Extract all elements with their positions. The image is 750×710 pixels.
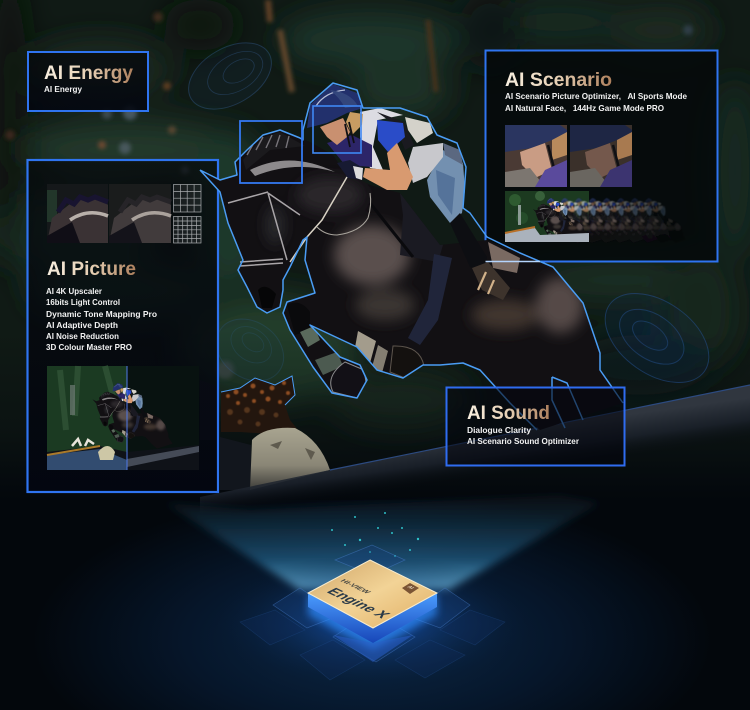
- feature list: AI Picture: Dynamic Tone Mapping Pro: [46, 309, 157, 319]
- chip badge: AI: [402, 583, 419, 594]
- thumbnail: face before: [505, 125, 567, 187]
- heading: AI Picture: AI Picture: [47, 259, 136, 280]
- feature list: AI Sound: Dialogue Clarity: [467, 425, 531, 435]
- feature list: AI Scenario: AI Natural Face, 144Hz Game Mode PRO: [505, 103, 664, 113]
- thumbnail: face after: [570, 125, 632, 187]
- icon: coarse pixel grid: [174, 184, 201, 212]
- comparison thumbnail: colour master: [47, 366, 199, 470]
- thumbnail: mane before: [47, 184, 108, 243]
- panel: AI Energy: [28, 52, 148, 111]
- chip badge: AI: AI: [405, 585, 416, 590]
- light beam from the chip: [165, 495, 600, 590]
- feature list: AI Sound: AI Scenario Sound Optimizer: [467, 436, 580, 446]
- thumbnail: mane after: [109, 184, 171, 243]
- panel: AI Picture: [28, 160, 218, 492]
- panel: AI Scenario: [486, 50, 718, 262]
- feature list: AI Scenario: AI Scenario Picture Optimizer, AI Sports Mode: [505, 91, 687, 101]
- panel: AI Sound: [446, 388, 624, 466]
- feature list: AI Picture: [46, 286, 157, 352]
- heading: AI Scenario: AI Scenario: [505, 70, 612, 91]
- feature list: AI Picture: AI Noise Reduction: [46, 331, 119, 341]
- chip label: HI-VIEW: HI-VIEW: [338, 579, 372, 595]
- circuit board glow: [207, 554, 537, 690]
- feature list: AI Picture: 3D Colour Master PRO: [46, 342, 132, 352]
- feature list: AI Picture: 16bits Light Control: [46, 297, 120, 307]
- white fence ornament: [250, 428, 330, 490]
- chip glow: [308, 593, 437, 650]
- thumbnail: motion trail: [505, 191, 686, 243]
- shrub: [221, 376, 298, 434]
- callout frame: horse mane: [240, 121, 302, 183]
- chip label: Engine X: Engine X: [322, 586, 393, 620]
- chip: Engine X processor: [207, 545, 537, 690]
- icon: fine pixel grid: [174, 216, 201, 243]
- chip base: [333, 635, 413, 662]
- text: AI Energy subtitle: AI Energy: [44, 84, 82, 94]
- feature list: AI Picture: AI 4K Upscaler: [46, 286, 103, 296]
- outline: blue glow around horse and rider: [200, 83, 623, 430]
- ripple: upper left: [177, 29, 283, 123]
- chip top: [308, 560, 437, 628]
- circuit board plates: [273, 545, 470, 662]
- jump fence and shrubs: [200, 376, 750, 515]
- ripple: right: [589, 275, 725, 401]
- feature list: AI Sound: [467, 425, 580, 446]
- heading: AI Energy: AI Energy: [44, 63, 133, 84]
- callout frame: rider face: [313, 106, 361, 153]
- chip sides: [308, 593, 437, 643]
- frame highlight: AI Scenario edge over the horse: [486, 260, 540, 262]
- feature list: AI Picture: AI Adaptive Depth: [46, 320, 118, 330]
- heading: AI Sound: AI Sound: [467, 403, 550, 424]
- feature list: AI Scenario: [505, 91, 687, 113]
- horse and rider: [200, 83, 623, 430]
- ripple: lower left: [204, 306, 296, 394]
